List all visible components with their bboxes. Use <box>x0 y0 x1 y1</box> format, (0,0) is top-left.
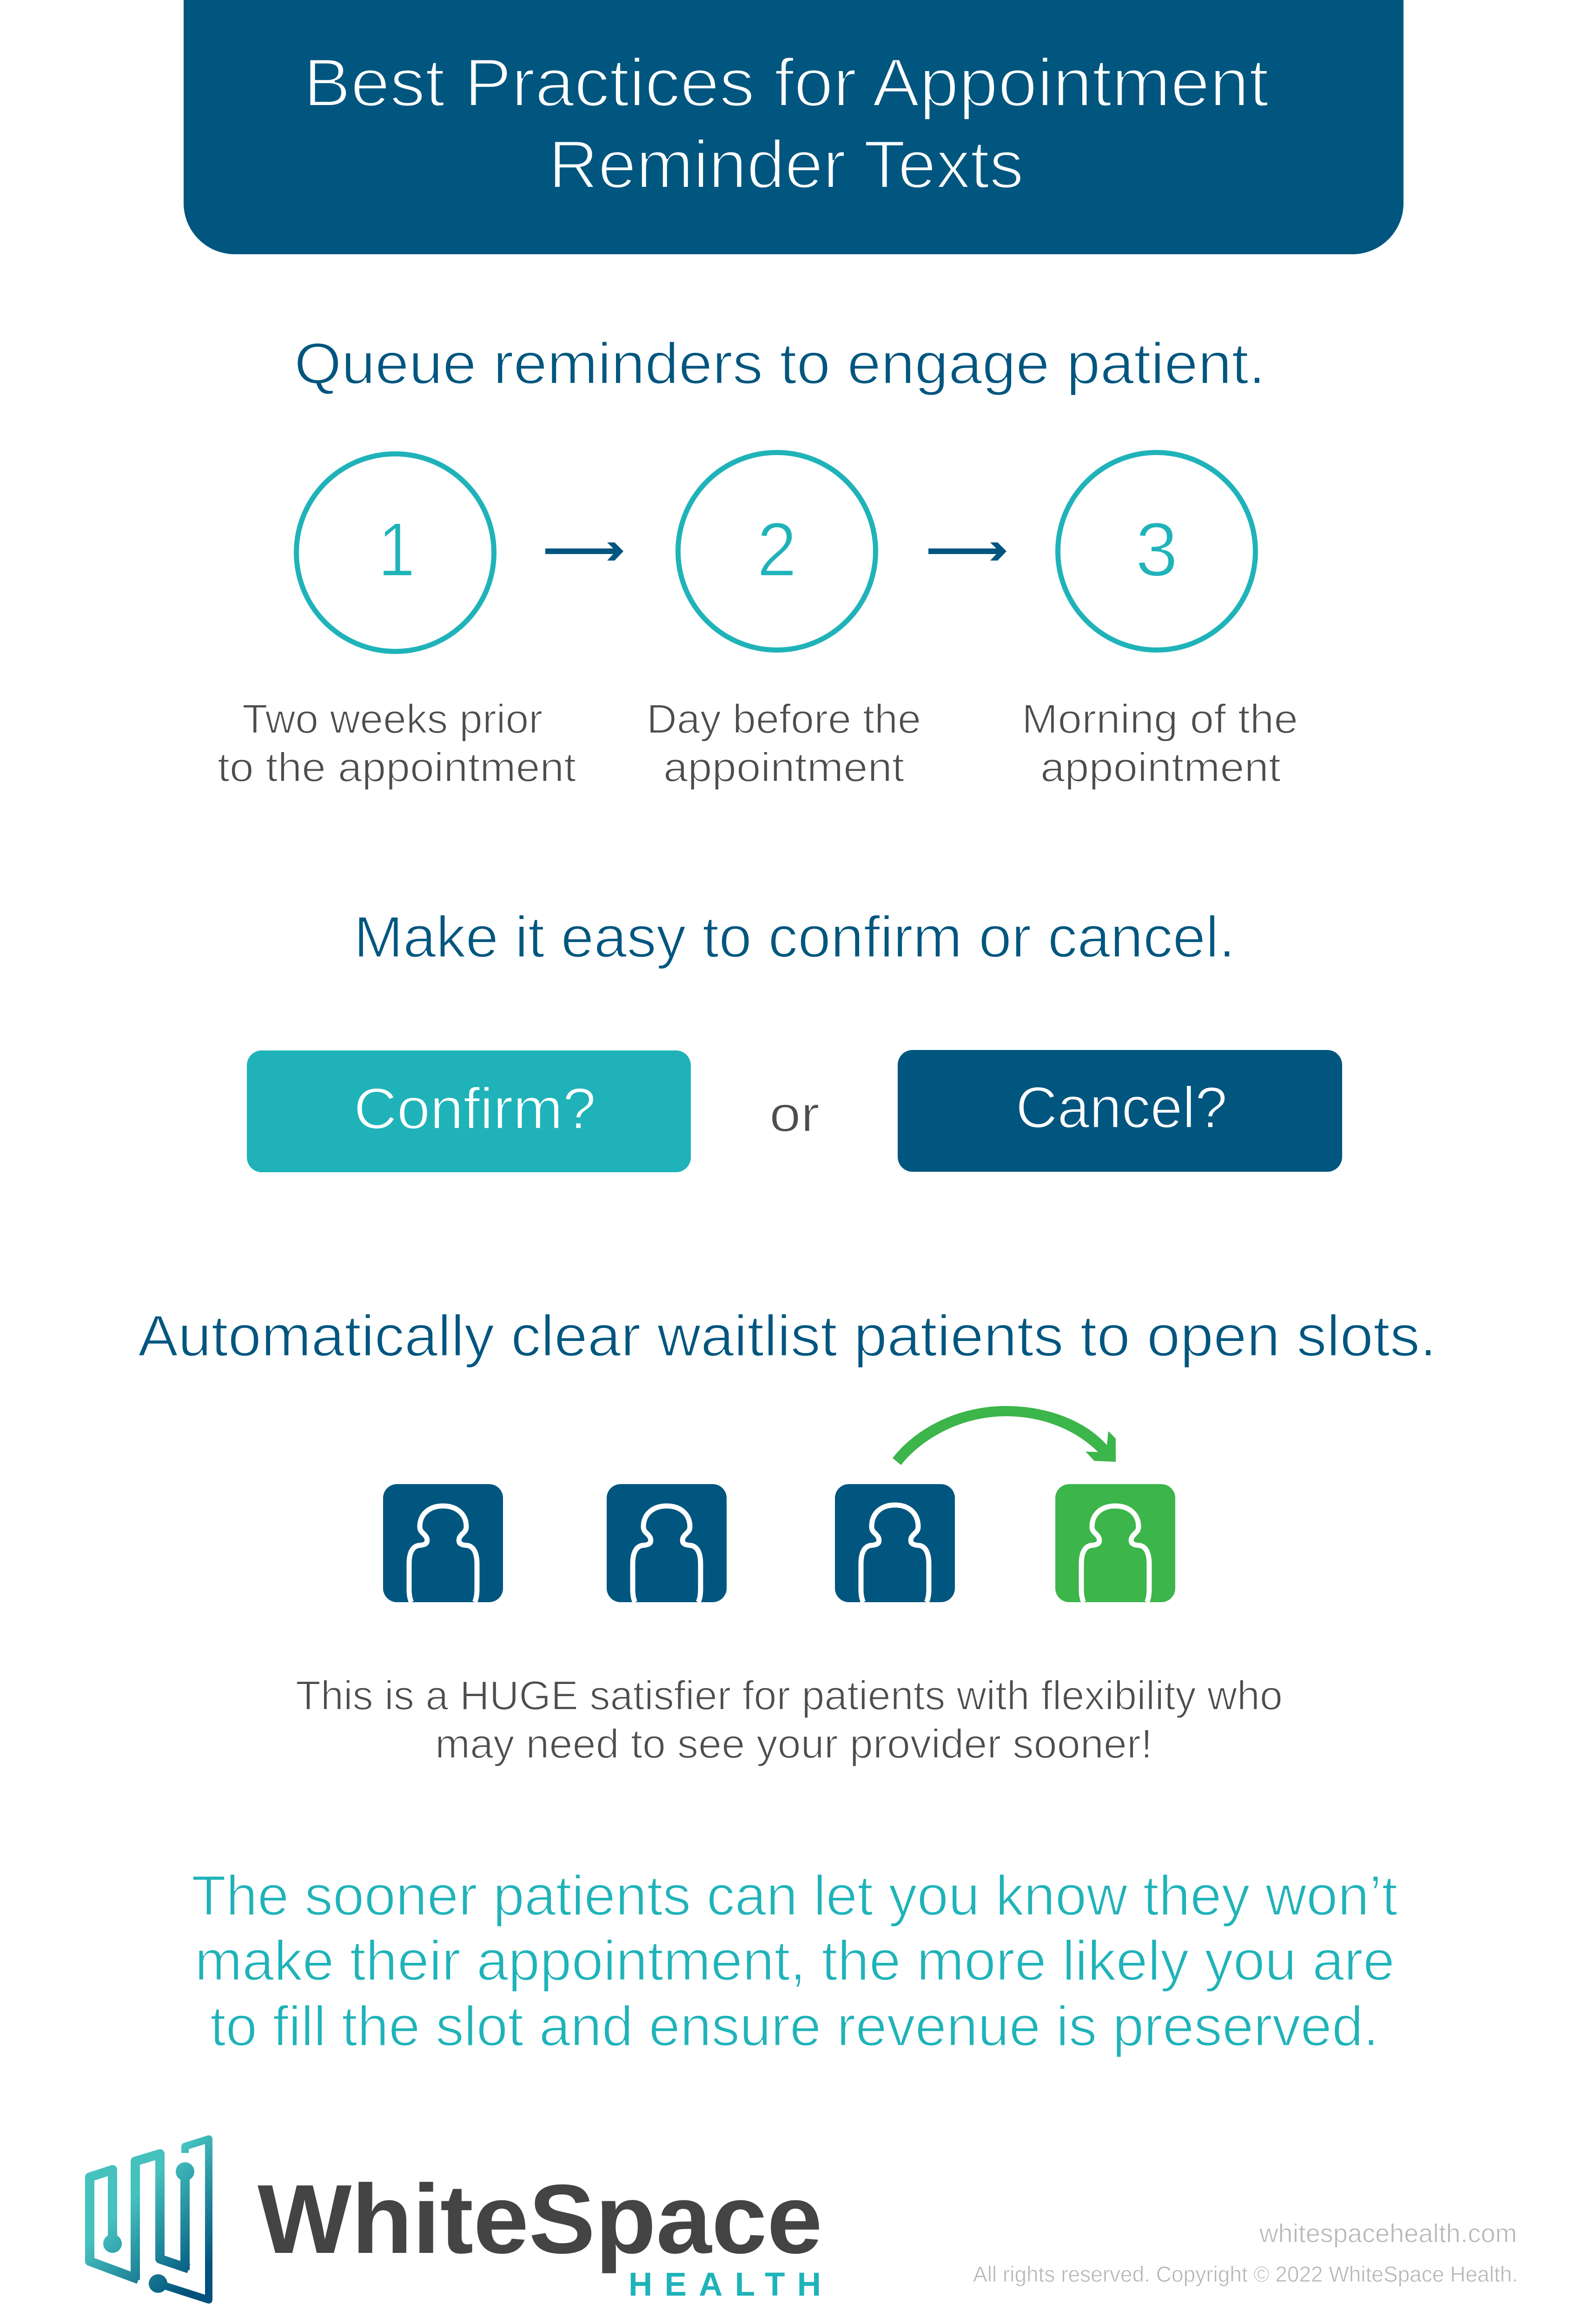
text: teal conclusion: make their appointment, the more likely you are <box>195 1929 1395 1992</box>
logo subword: HEALTH <box>629 2266 821 2303</box>
step 1 label: to the appointment <box>218 744 576 790</box>
title banner: Best Practices for Appointment <box>304 45 1269 120</box>
step 2 label <box>647 696 921 790</box>
step 1 circle <box>297 454 494 652</box>
icon: person 1 <box>383 1484 503 1602</box>
heading: confirm or cancel: Make it easy to confirm or cancel. <box>354 905 1235 970</box>
button: cancel <box>898 1050 1342 1172</box>
arrow: step 2 to 3 <box>928 542 1006 561</box>
button: confirm: Confirm? <box>354 1076 596 1141</box>
title banner: Reminder Texts <box>549 126 1024 202</box>
step 3 label: Morning of the <box>1022 696 1298 742</box>
step 1 label: Two weeks prior <box>242 696 543 742</box>
step 2 circle <box>678 453 876 650</box>
button: confirm <box>247 1050 691 1172</box>
step 3 circle <box>1058 453 1255 650</box>
icon: person 2 <box>607 1484 727 1602</box>
text: teal conclusion <box>192 1864 1397 2058</box>
icon: curved green arrow <box>893 1406 1116 1465</box>
text: or: or <box>769 1086 820 1142</box>
step 1 circle: 1 <box>378 507 415 592</box>
title banner <box>184 0 1403 254</box>
logo: WhiteSpace Health <box>90 2139 822 2303</box>
heading: clear waitlist: Automatically clear waitlist patients to open slots. <box>138 1304 1437 1368</box>
text: teal conclusion: to fill the slot and ensure revenue is preserved. <box>210 1994 1379 2058</box>
heading: queue reminders: Queue reminders to engage patient. <box>294 331 1265 396</box>
icon: person 4 green <box>1055 1484 1175 1602</box>
step 2 label: Day before the <box>647 696 921 742</box>
website url: whitespacehealth.com <box>1259 2218 1517 2248</box>
step 2 label: appointment <box>663 744 904 790</box>
step 3 label <box>1022 696 1298 790</box>
text: teal conclusion: The sooner patients can let you know they won’t <box>192 1864 1397 1927</box>
step 3 label: appointment <box>1040 744 1281 790</box>
step 1 label <box>218 696 576 790</box>
copyright: All rights reserved. Copyright © 2022 WhiteSpace Health. <box>973 2262 1518 2286</box>
step 2 circle: 2 <box>757 507 797 592</box>
arrow: step 1 to 2 <box>545 542 623 561</box>
icon: person 3 <box>835 1484 955 1602</box>
logo mark <box>90 2139 209 2300</box>
text: huge satisfier note: may need to see your provider sooner! <box>435 1721 1152 1767</box>
step 3 circle: 3 <box>1135 507 1178 592</box>
text: huge satisfier note: This is a HUGE satisfier for patients with flexibility who <box>296 1672 1283 1718</box>
text: huge satisfier note <box>296 1672 1283 1767</box>
button: cancel: Cancel? <box>1016 1076 1227 1140</box>
logo wordmark: WhiteSpace <box>258 2164 822 2274</box>
